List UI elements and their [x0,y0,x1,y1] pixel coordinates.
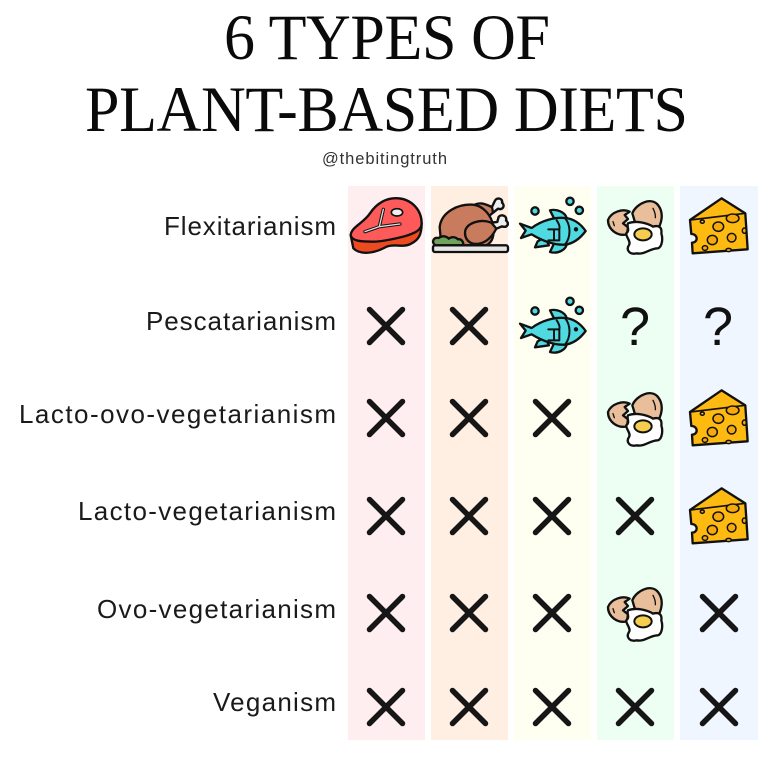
label: Flexitarianism: Flexitarianism [164,211,336,241]
panel: dairy column [680,186,758,740]
handle text: @thebitingtruth [322,150,447,168]
icon: roast chicken [433,199,508,252]
panel: fish column [514,186,591,740]
label: Lacto-vegetarianism: Lacto-vegetarianism [78,496,336,526]
title: PLANT-BASED DIETS [85,73,688,145]
label: Ovo-vegetarianism: Ovo-vegetarianism [97,594,336,624]
title: 6 TYPES OF [224,1,550,73]
icon: cheese [690,198,748,253]
row: Ovo-vegetarianism marks [370,588,736,641]
row: Lacto-vegetarianism marks [370,488,748,543]
row: Pescatarianism marks: ? [703,297,733,357]
row: Pescatarianism marks [370,297,733,357]
row: Lacto-ovo-vegetarianism marks [370,390,748,446]
label: Veganism: Veganism [213,687,336,717]
icon: eggs [608,201,662,254]
row: Pescatarianism marks: ? [620,297,650,357]
panel: meat column [348,186,425,740]
label: Pescatarianism: Pescatarianism [146,306,336,336]
label: Lacto-ovo-vegetarianism: Lacto-ovo-vegetarianism [19,399,336,429]
icon: meat [351,198,422,253]
row: Veganism marks [370,690,736,724]
panel: eggs column [597,186,674,740]
title [85,1,688,145]
icon: fish [520,198,586,253]
panel: poultry column [431,186,508,740]
